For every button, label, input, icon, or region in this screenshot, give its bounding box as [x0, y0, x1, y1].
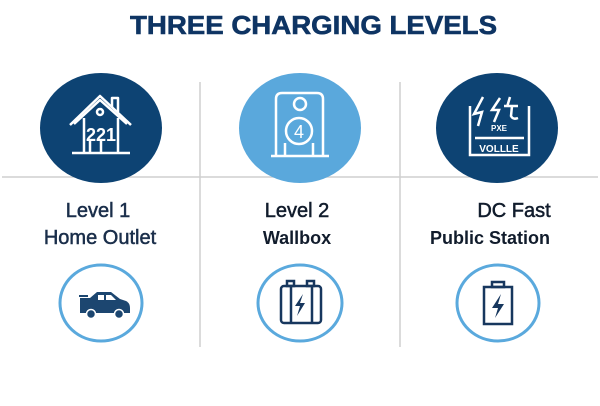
text: level 2: Level 2 — [265, 200, 329, 222]
icon: car — [60, 265, 142, 341]
icon: battery — [457, 265, 539, 341]
icon: wallbox circle: 4 — [294, 122, 304, 142]
title: THREE CHARGING LEVELS — [130, 10, 497, 40]
icon: battery pack — [258, 265, 342, 341]
icon: DC fast station circle — [436, 73, 558, 183]
text: DC fast — [430, 200, 551, 248]
icon: wallbox circle — [239, 73, 361, 183]
text: level 2 — [263, 200, 331, 248]
text: DC fast: DC Fast — [477, 200, 551, 222]
text: level 1: Home Outlet — [44, 227, 157, 249]
text: level 1 — [44, 200, 157, 249]
text: level 1: Level 1 — [66, 200, 130, 222]
icon: home outlet circle: 221 — [86, 125, 116, 145]
icon: DC fast station circle: PXE — [491, 124, 508, 133]
text: level 2: Wallbox — [263, 228, 331, 248]
icon: home outlet circle — [40, 73, 162, 183]
icon: DC fast station circle: VOLLLE — [479, 144, 519, 155]
text: DC fast: Public Station — [430, 228, 550, 248]
